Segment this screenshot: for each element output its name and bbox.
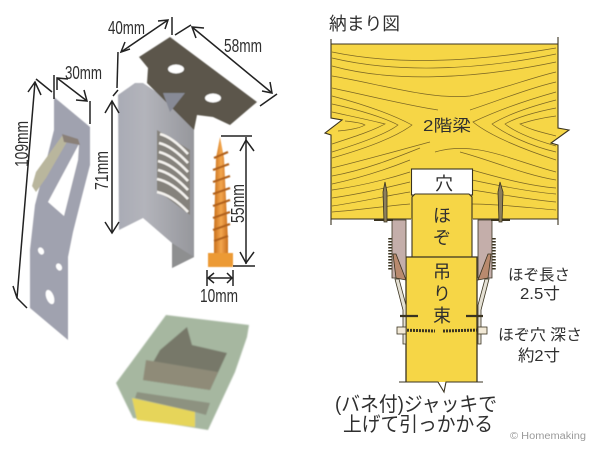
note: tenon length bbox=[508, 266, 570, 303]
note: mortise depth: ほぞ穴 深さ bbox=[498, 326, 582, 344]
louvers bbox=[157, 130, 190, 215]
photo: angle bracket bbox=[118, 37, 257, 268]
note: mortise depth bbox=[498, 326, 582, 365]
dimension labels bbox=[12, 18, 262, 306]
photo: orange screw bbox=[208, 137, 233, 267]
diagram: tenon bbox=[412, 194, 472, 258]
label: 55mm: 55mm bbox=[228, 184, 248, 223]
beam outline bbox=[325, 37, 569, 225]
dimension: 109mm bbox=[13, 82, 41, 308]
title: 納まり図 bbox=[329, 14, 400, 34]
label: 71mm: 71mm bbox=[92, 151, 112, 190]
label: 109mm: 109mm bbox=[12, 121, 32, 167]
dimension: 10mm bbox=[207, 270, 233, 286]
note: jack instruction bbox=[335, 393, 497, 436]
label: beam: 2階梁 bbox=[423, 117, 471, 135]
diagram: tenon: ぞ bbox=[433, 228, 451, 248]
dimension: 30mm bbox=[36, 75, 90, 124]
diagram: beam bbox=[325, 37, 569, 225]
label: 10mm: 10mm bbox=[200, 286, 238, 306]
label: 58mm: 58mm bbox=[224, 36, 262, 56]
photo: flat strap plate bbox=[30, 97, 90, 340]
label: 40mm: 40mm bbox=[108, 18, 145, 38]
diagram: hanging post: り bbox=[433, 284, 451, 304]
label: hole: 穴 bbox=[435, 174, 453, 194]
bracket body bbox=[118, 83, 194, 268]
diagram: hanging post bbox=[399, 257, 483, 392]
photo: box of screws bbox=[116, 315, 249, 430]
note: mortise depth: 約2寸 bbox=[518, 347, 560, 365]
wood grain bbox=[332, 48, 556, 212]
dimension: 71mm bbox=[105, 101, 119, 233]
dimension: 58mm bbox=[175, 25, 277, 106]
bracket top plate bbox=[139, 37, 257, 130]
note: tenon length: 2.5寸 bbox=[520, 285, 560, 303]
diagram: mortise hole bbox=[412, 169, 472, 195]
dimension: 40mm bbox=[113, 17, 172, 96]
note: jack instruction: 上げて引っかかる bbox=[343, 413, 493, 436]
label: hanging post: 吊 bbox=[433, 262, 451, 282]
dimension: 55mm bbox=[221, 136, 255, 266]
diagram: left hardware bbox=[374, 182, 435, 344]
note: jack instruction: (バネ付)ジャッキで bbox=[335, 393, 497, 416]
label: 30mm: 30mm bbox=[65, 63, 102, 83]
note: tenon length: ほぞ長さ bbox=[508, 266, 570, 284]
diagram: right hardware bbox=[443, 182, 510, 344]
dimension lines bbox=[13, 17, 277, 308]
label: tenon: ほ bbox=[433, 206, 451, 226]
diagram: hanging post: 束 bbox=[433, 306, 451, 326]
copyright: © Homemaking bbox=[510, 431, 586, 442]
